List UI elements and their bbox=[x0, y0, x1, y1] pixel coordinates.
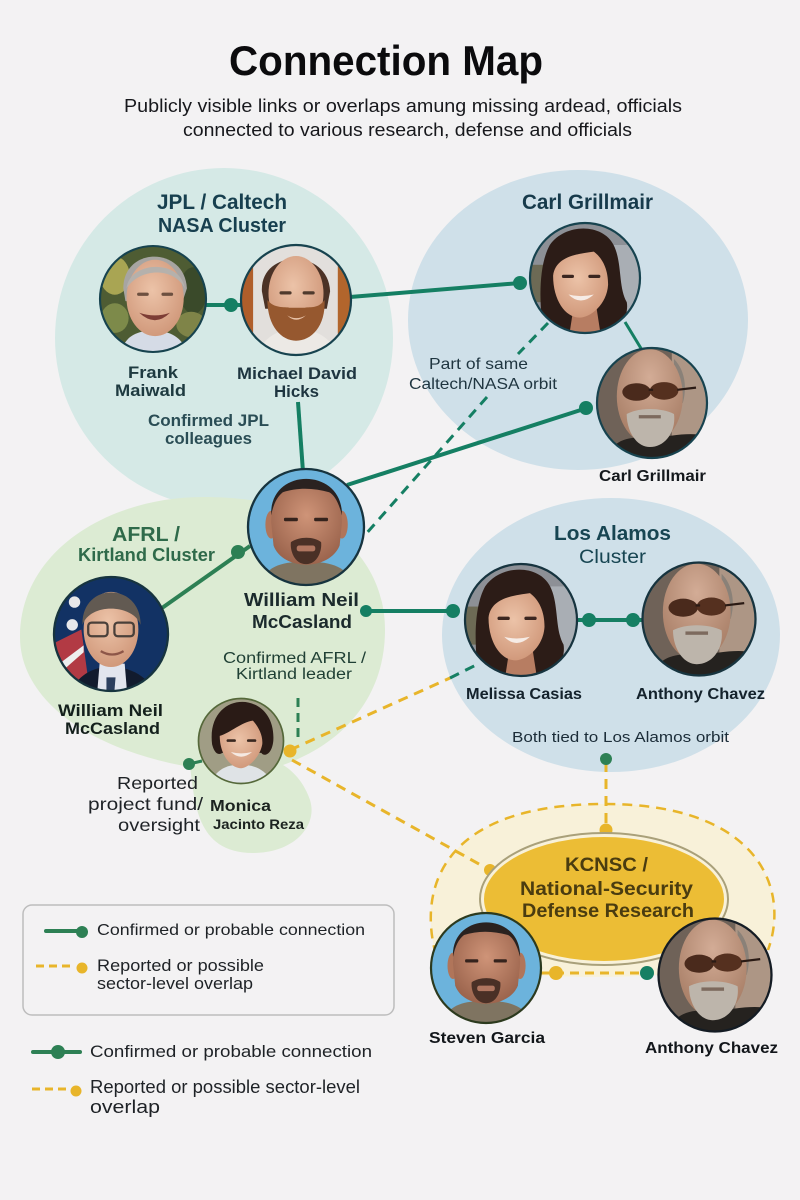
label: William Neil McCasland (lower): William Neil bbox=[58, 701, 163, 720]
label: Carl Grillmair: Carl Grillmair bbox=[599, 468, 706, 485]
label: Michael David Hicks bbox=[237, 364, 357, 401]
panel: Los Alamos cluster background bbox=[442, 498, 780, 772]
note: Part of same Caltech/NASA orbit bbox=[409, 356, 558, 393]
note: Confirmed AFRL / Kirtland leader: Kirtland leader bbox=[236, 666, 352, 683]
note: Reported project fund/oversight bbox=[88, 773, 203, 835]
heading: AFRL / Kirtland Cluster bbox=[78, 524, 215, 565]
portrait: Melissa Casias bbox=[465, 564, 577, 676]
label: Michael David Hicks: Michael David bbox=[237, 364, 357, 383]
heading: JPL / Caltech NASA Cluster bbox=[157, 191, 287, 237]
note: Part of same Caltech/NASA orbit: Caltech/NASA orbit bbox=[409, 376, 558, 393]
label: William Neil McCasland (lower) bbox=[58, 701, 163, 738]
note: Reported project fund/oversight: project fund/ bbox=[88, 794, 203, 814]
heading: Carl Grillmair: Carl Grillmair bbox=[522, 191, 653, 214]
dashed connector: Monica to KCNSC bbox=[292, 760, 496, 876]
connector: Michael Hicks to upper woman portrait bbox=[350, 276, 527, 297]
legend row: reported overlap: Reported or possible sector-level bbox=[90, 1077, 360, 1097]
label: William Neil McCasland (upper): William Neil bbox=[244, 590, 359, 610]
dashed connector: Caltech/NASA orbit lower segment bbox=[365, 397, 487, 535]
connector: William Neil to Carl Grillmair bbox=[347, 401, 593, 485]
heading: JPL / Caltech NASA Cluster: JPL / Caltech bbox=[157, 191, 287, 214]
connector: William Neil to Melissa Casias bbox=[360, 604, 460, 618]
heading: AFRL / Kirtland Cluster: AFRL / bbox=[112, 524, 180, 546]
connector: Michael Hicks to William Neil bbox=[298, 402, 303, 472]
legend row: reported overlap: overlap bbox=[90, 1097, 160, 1117]
portrait: Steven Garcia bbox=[431, 913, 541, 1023]
title: Connection Map bbox=[229, 37, 543, 84]
connector: McCasland portraits bbox=[162, 545, 250, 608]
note: Reported project fund/oversight: oversight bbox=[118, 815, 200, 835]
heading: JPL / Caltech NASA Cluster: NASA Cluster bbox=[158, 215, 286, 237]
legend item: confirmed connection: Confirmed or probable connection bbox=[97, 922, 365, 939]
label: Monica Jacinto Reza: Jacinto Reza bbox=[213, 816, 304, 832]
label: Frank Maiwald: Maiwald bbox=[115, 381, 186, 400]
note: Confirmed JPL colleagues: colleagues bbox=[165, 430, 252, 448]
heading: Los Alamos Cluster: Cluster bbox=[579, 547, 647, 568]
label: William Neil McCasland (upper) bbox=[244, 590, 359, 632]
legend row: confirmed connection: Confirmed or probable connection bbox=[90, 1042, 372, 1061]
label: Michael David Hicks: Hicks bbox=[274, 382, 319, 401]
portrait: William Neil McCasland (flag background) bbox=[54, 577, 168, 691]
note: Confirmed JPL colleagues bbox=[148, 412, 269, 448]
label: Frank Maiwald bbox=[115, 363, 186, 400]
panel: KCNSC core ellipse bbox=[480, 833, 728, 965]
label: Anthony Chavez: Anthony Chavez bbox=[636, 686, 765, 703]
dashed connector: Los Alamos to KCNSC bbox=[600, 753, 612, 836]
label: Frank Maiwald: Frank bbox=[128, 363, 179, 382]
portrait: Monica Jacinto Reza bbox=[198, 698, 284, 784]
label: William Neil McCasland (upper): McCasland bbox=[252, 612, 352, 632]
note: Confirmed JPL colleagues: Confirmed JPL bbox=[148, 412, 269, 430]
connector dot: Monica sector overlap bbox=[284, 744, 296, 758]
note: Part of same Caltech/NASA orbit: Part of same bbox=[429, 356, 528, 373]
dashed connector: Monica to Melissa Casias bbox=[290, 665, 476, 750]
panel: KCNSC outer dashed halo bbox=[431, 804, 774, 977]
note: Confirmed AFRL / Kirtland leader: Confirmed AFRL / bbox=[223, 650, 367, 667]
connector dot: Monica project oversight bbox=[183, 758, 202, 770]
portrait: upper woman bbox=[530, 223, 640, 333]
subtitle bbox=[124, 95, 682, 140]
subtitle: Publicly visible links or overlaps amung missing ardead, officials bbox=[124, 95, 682, 116]
legend row: reported overlap bbox=[32, 1077, 360, 1117]
portrait: Anthony Chavez bbox=[642, 562, 756, 676]
legend item: reported overlap bbox=[36, 956, 264, 993]
portrait: William Neil McCasland (blue background) bbox=[248, 469, 364, 585]
heading: Los Alamos Cluster bbox=[554, 523, 671, 568]
legend item: reported overlap: Reported or possible bbox=[97, 956, 264, 975]
label: Melissa Casias: Melissa Casias bbox=[466, 686, 582, 703]
KCNSC label: Defense Research bbox=[522, 900, 694, 922]
note: Both tied to Los Alamos orbit: Both tied to Los Alamos orbit bbox=[512, 729, 730, 746]
panel: AFRL / Kirtland cluster background bbox=[20, 497, 385, 853]
dashed connector: AFRL leader note to Monica bbox=[296, 698, 300, 742]
subtitle: connected to various research, defense and officials bbox=[183, 119, 632, 140]
portrait: Anthony Chavez (lower) bbox=[658, 918, 772, 1032]
note: Confirmed AFRL / Kirtland leader bbox=[223, 650, 367, 683]
label: Anthony Chavez (lower): Anthony Chavez bbox=[645, 1040, 778, 1057]
legend item: reported overlap: sector-level overlap bbox=[97, 974, 253, 993]
connector: upper woman portrait to Carl Grillmair bbox=[625, 322, 642, 350]
heading: AFRL / Kirtland Cluster: Kirtland Cluster bbox=[78, 545, 215, 565]
portrait: Carl Grillmair bbox=[597, 348, 707, 458]
portrait: Frank Maiwald bbox=[100, 246, 207, 352]
note: Reported project fund/oversight: Reported bbox=[117, 773, 198, 793]
legend box bbox=[23, 905, 394, 1015]
KCNSC label: KCNSC / bbox=[565, 854, 649, 876]
label: Monica Jacinto Reza bbox=[210, 798, 304, 832]
heading: Los Alamos Cluster: Los Alamos bbox=[554, 523, 671, 545]
label: Steven Garcia: Steven Garcia bbox=[429, 1030, 545, 1047]
KCNSC label: National-Security bbox=[520, 878, 693, 900]
portrait: Michael David Hicks bbox=[241, 245, 351, 355]
label: William Neil McCasland (lower): McCasland bbox=[65, 719, 160, 738]
connector: Frank Maiwald to Michael Hicks bbox=[205, 298, 244, 312]
panel: Carl Grillmair cluster background bbox=[408, 170, 748, 470]
panel: JPL / Caltech NASA cluster background bbox=[55, 168, 393, 508]
connector: Melissa Casias to Anthony Chavez bbox=[575, 613, 645, 627]
label: Monica Jacinto Reza: Monica bbox=[210, 798, 271, 815]
KCNSC label bbox=[520, 854, 694, 922]
dashed connector: Steven Garcia to Anthony Chavez bbox=[540, 966, 654, 980]
dashed connector: Caltech/NASA orbit upper segment bbox=[518, 323, 548, 354]
